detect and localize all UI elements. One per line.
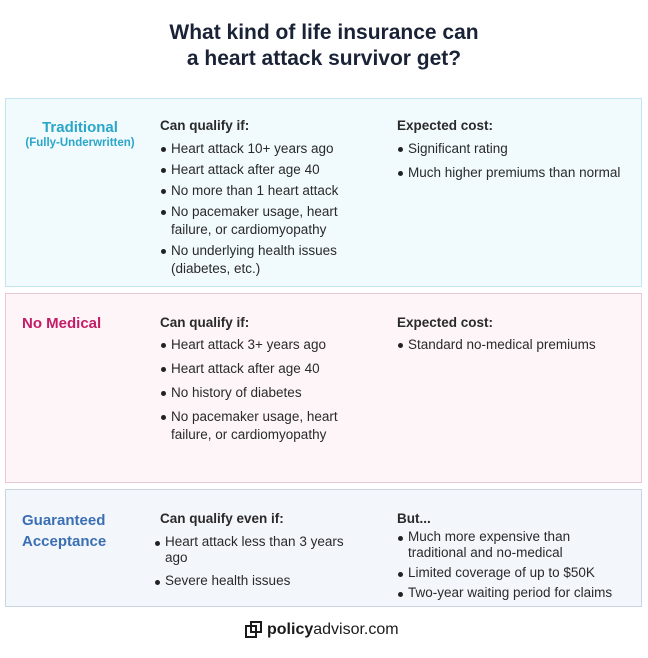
logo: policyadvisor: policyadvisor.com	[267, 621, 399, 638]
heading: can qualify: Can qualify if:	[160, 315, 249, 330]
list: traditional criteria: No pacemaker usage, heart failure, or cardiomyopathy	[171, 204, 338, 237]
label: no medical: No Medical	[22, 315, 101, 332]
list: traditional cost	[398, 141, 620, 180]
label: traditional	[25, 119, 135, 149]
list: no medical criteria: No history of diabetes	[171, 385, 302, 400]
list: no medical cost: Standard no-medical premiums	[408, 337, 596, 352]
panel: traditional	[5, 98, 642, 287]
list: no medical criteria	[161, 337, 338, 442]
heading: but: But...	[397, 511, 431, 526]
title: What kind of life insurance can	[169, 21, 479, 44]
label: guaranteed: Guaranteed	[22, 512, 105, 529]
panel: no medical	[5, 293, 642, 483]
list: guaranteed criteria: Severe health issues	[165, 573, 290, 588]
list: traditional cost: Significant rating	[408, 141, 508, 156]
list: no medical criteria: Heart attack 3+ years ago	[171, 337, 326, 352]
list: no medical criteria: No pacemaker usage, heart failure, or cardiomyopathy	[171, 409, 338, 442]
heading: expected cost: Expected cost:	[397, 118, 493, 133]
list: guaranteed drawbacks: Much more expensive than traditional and no-medical	[408, 529, 570, 560]
list: guaranteed drawbacks	[398, 529, 612, 600]
list: traditional criteria: No underlying health issues (diabetes, etc.)	[171, 243, 337, 276]
label: traditional: (Fully-Underwritten)	[25, 137, 135, 149]
label: traditional: Traditional	[42, 119, 118, 136]
title	[169, 21, 479, 70]
list: guaranteed drawbacks: Two-year waiting period for claims	[408, 585, 612, 600]
list: guaranteed criteria	[155, 534, 344, 588]
list: traditional criteria: Heart attack 10+ years ago	[171, 141, 333, 156]
icon: logo mark	[245, 621, 262, 638]
label: guaranteed: Acceptance	[22, 533, 106, 550]
list: traditional criteria: No more than 1 heart attack	[171, 183, 338, 198]
title: a heart attack survivor get?	[187, 47, 461, 70]
list: traditional criteria: Heart attack after age 40	[171, 162, 320, 177]
list: guaranteed criteria: Heart attack less than 3 years ago	[165, 534, 344, 565]
heading: can qualify even if: Can qualify even if:	[160, 511, 284, 526]
list: traditional criteria	[161, 141, 338, 276]
heading: expected cost: Expected cost:	[397, 315, 493, 330]
list: traditional cost: Much higher premiums than normal	[408, 165, 620, 180]
heading: can qualify: Can qualify if:	[160, 118, 249, 133]
list: guaranteed drawbacks: Limited coverage of up to $50K	[408, 565, 595, 580]
panel: guaranteed acceptance	[5, 489, 642, 607]
label: guaranteed	[22, 512, 106, 550]
list: no medical criteria: Heart attack after age 40	[171, 361, 320, 376]
